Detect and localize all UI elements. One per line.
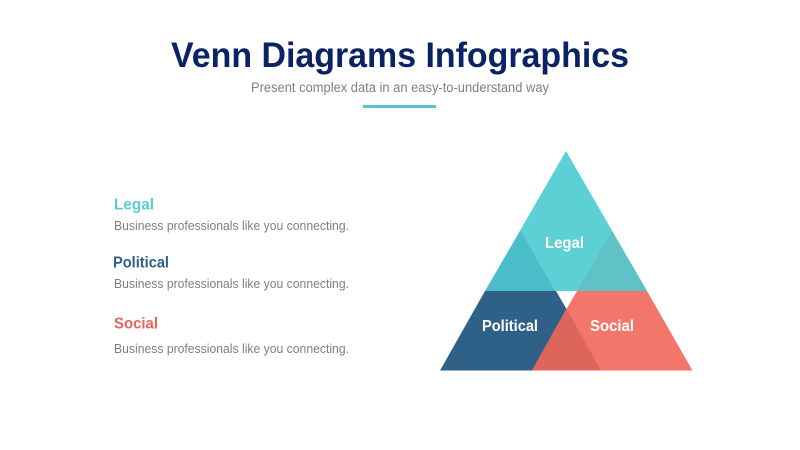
description: social: Business professionals like you connecting.	[114, 341, 349, 356]
description: legal: Business professionals like you connecting.	[114, 218, 349, 233]
label: social: Social	[590, 318, 634, 335]
label: legal: Legal	[545, 235, 584, 252]
segment: political	[440, 291, 566, 370]
segment: social	[532, 291, 692, 370]
overlap: political and social	[532, 309, 601, 370]
heading: political: Political	[113, 254, 169, 272]
heading: legal: Legal	[114, 196, 154, 214]
segment: legal	[485, 151, 647, 291]
description: political: Business professionals like you connecting.	[114, 276, 349, 291]
overlap: legal and social	[577, 231, 647, 291]
text block: social	[114, 316, 349, 356]
subtitle: Present complex data in an easy-to-understand way	[251, 80, 549, 95]
text block: legal	[114, 196, 349, 233]
heading: social: Social	[114, 316, 158, 332]
title: Venn Diagrams Infographics	[171, 36, 629, 75]
label: political: Political	[482, 318, 538, 335]
title accent line	[363, 105, 436, 108]
venn triangle diagram	[440, 151, 692, 370]
text block: political	[113, 254, 349, 291]
overlap: legal and political	[485, 231, 555, 291]
